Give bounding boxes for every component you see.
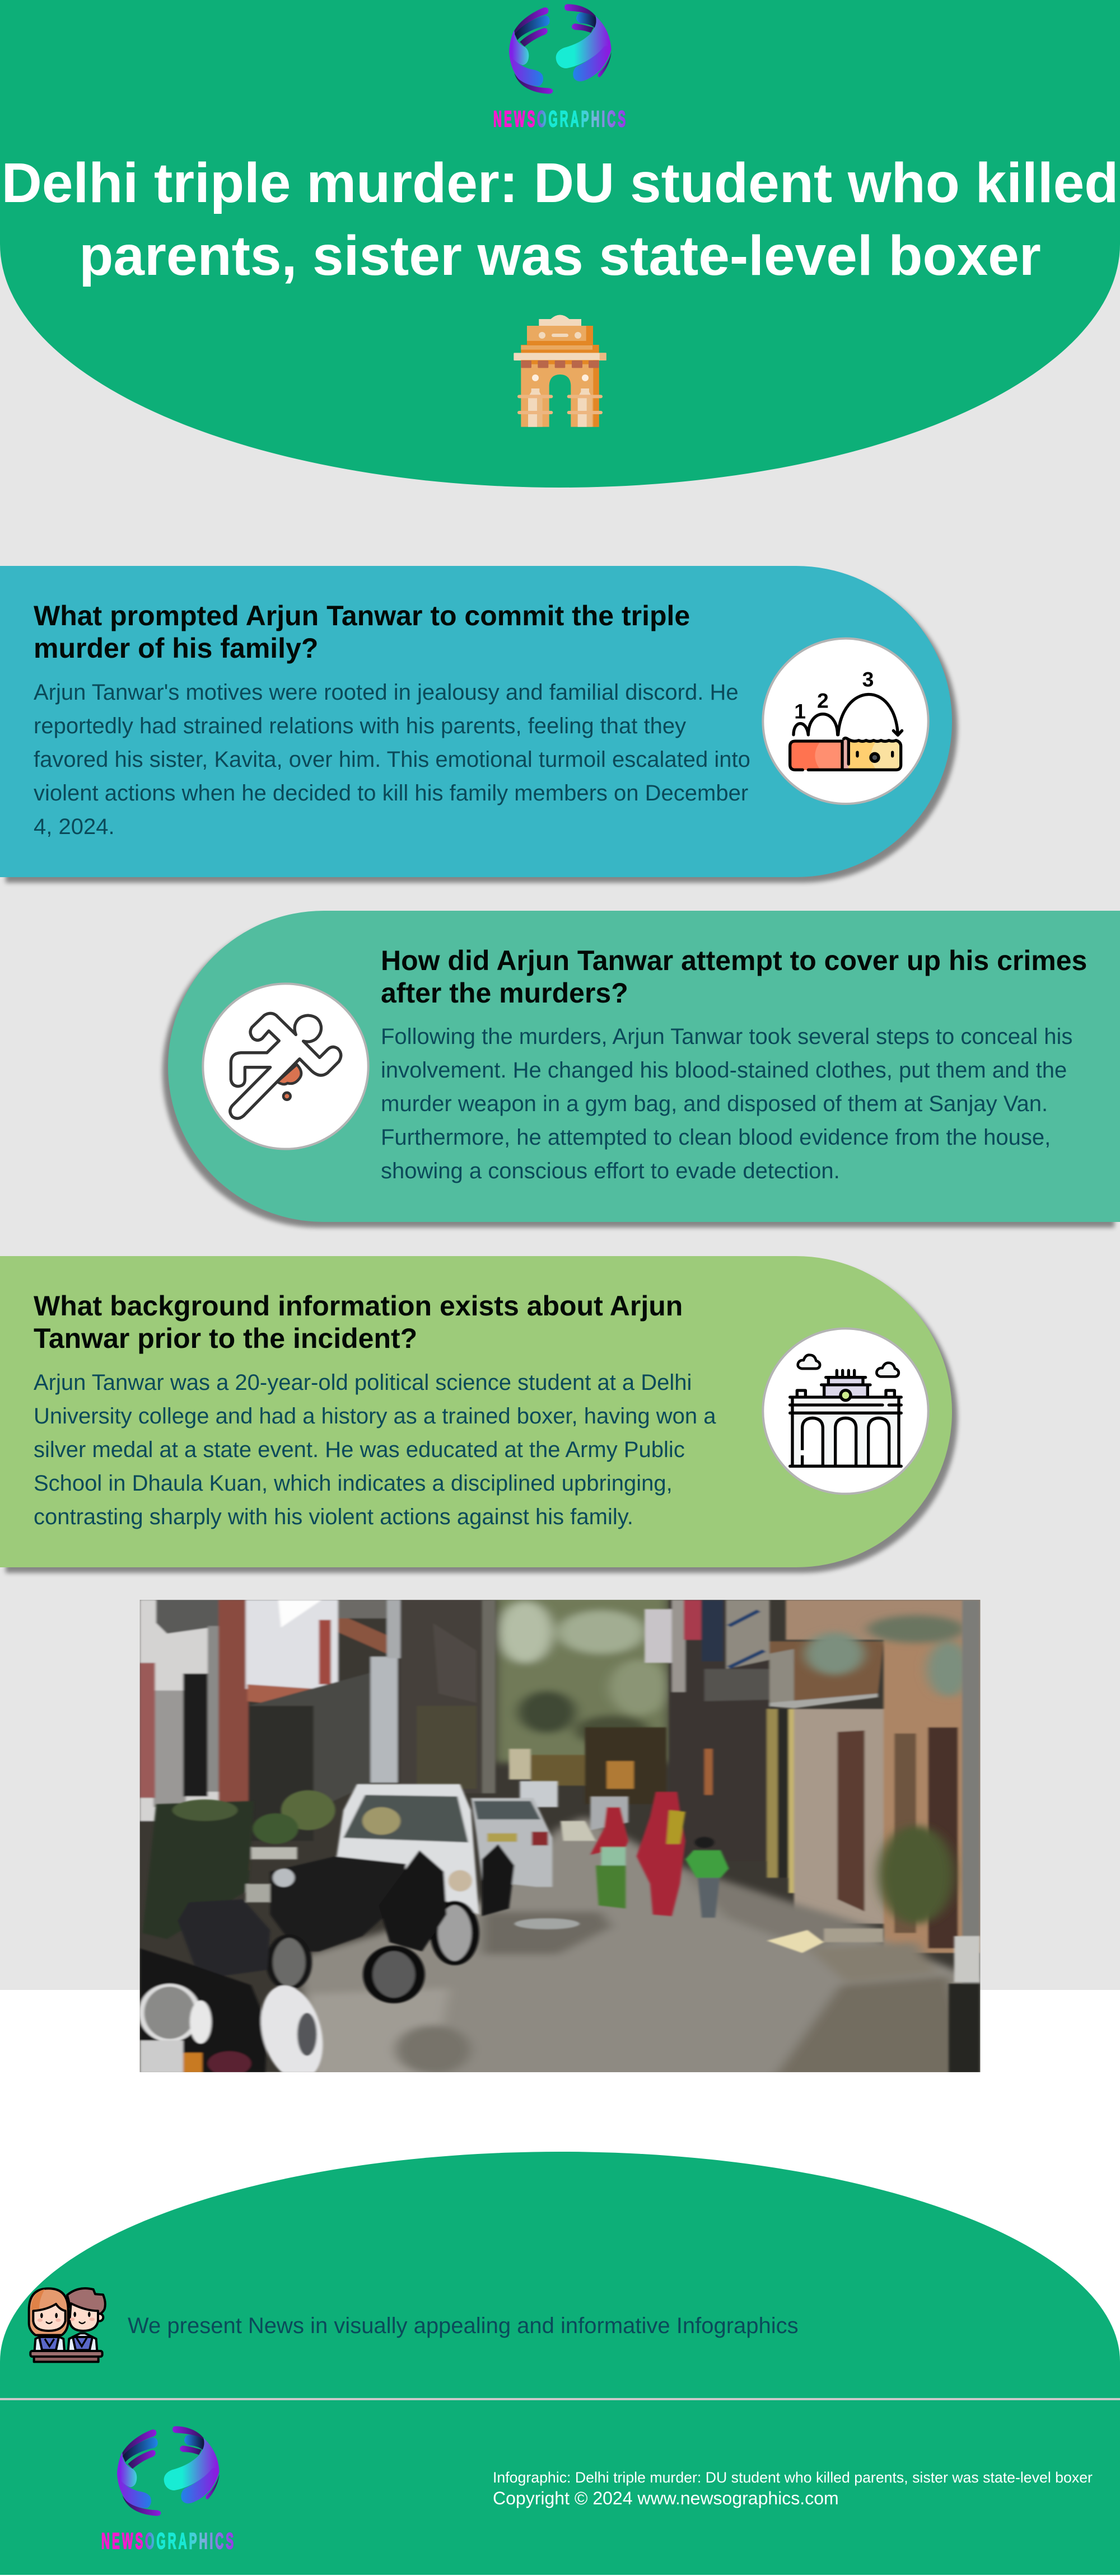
text: cover-up answer: showing a conscious effort to evade detection. [381,1159,840,1183]
logo: footer Newsographics [101,2426,236,2553]
panel: motive (teal card) [0,566,952,877]
text: cover-up answer: murder weapon in a gym bag, and disposed of them at Sanjay Van. [381,1092,1048,1116]
footer credit text: Infographic: Delhi triple murder: DU student who killed parents, sister was state-level boxer [493,2469,1093,2486]
heading: cover-up question [381,945,1087,1009]
photo: Delhi residential street with parked vehicles and pedestrians [140,1600,980,2072]
text: background answer [34,1370,716,1529]
heading: cover-up question: after the murders? [381,977,628,1009]
heading: motive question [34,600,690,664]
logo: footer Newsographics: NEWSOGRAPHICS [101,2528,236,2553]
heading: cover-up question: How did Arjun Tanwar attempt to cover up his crimes [381,945,1087,976]
footer credit text [493,2469,1093,2508]
footer divider line [0,2398,1120,2400]
text: cover-up answer: involvement. He changed his blood-stained clothes, put them and the [381,1058,1067,1083]
text: motive answer: favored his sister, Kavita, over him. This emotional turmoil escalated into [34,747,750,772]
footer: green arched panel [0,2152,1120,2575]
icon: two student presenters at a desk [28,2287,106,2363]
heading: motive question: murder of his family? [34,633,318,664]
text: cover-up answer [381,1024,1072,1183]
text: motive answer: 4, 2024. [34,814,115,839]
heading: background question: Tanwar prior to the incident? [34,1323,417,1354]
text: background answer: University college and had a history as a trained boxer, having won a [34,1404,716,1428]
panel: cover up (green card) [168,911,1120,1222]
text: motive answer: violent actions when he decided to kill his family members on December [34,781,748,805]
logo: Newsographics: NEWSOGRAPHICS [493,106,628,132]
title [2,152,1118,287]
text: background answer: contrasting sharply with his violent actions against his family. [34,1505,633,1529]
icon: numbered jumps over a belt: 2 [817,689,829,713]
icon: arched gate with clouds [762,1327,930,1495]
icon: numbered jumps over a belt: 3 [862,668,874,691]
heading: background question [34,1290,683,1354]
icon: India Gate [514,315,606,427]
text: background answer: Arjun Tanwar was a 20-year-old political science student at a Delhi [34,1370,692,1395]
text: motive answer: Arjun Tanwar's motives were rooted in jealousy and familial discord. He [34,680,739,705]
heading: background question: What background information exists about Arjun [34,1290,683,1322]
icon: numbered jumps over a belt: 1 [794,699,806,723]
text: background answer: School in Dhaula Kuan, which indicates a disciplined upbringing, [34,1471,673,1496]
footer tagline: We present News in visually appealing and informative Infographics [128,2313,799,2338]
text: background answer: silver medal at a state event. He was educated at the Army Public [34,1437,685,1462]
header: green rounded banner [0,0,1120,488]
footer credit text: Copyright © 2024 www.newsographics.com [493,2488,839,2508]
panel: background (light green card) [0,1256,952,1567]
text: cover-up answer: Following the murders, Arjun Tanwar took several steps to conceal his [381,1024,1072,1049]
text: motive answer [34,680,750,839]
icon: running figure with blood [202,982,370,1150]
logo: Newsographics [493,4,628,132]
title: parents, sister was state-level boxer [79,224,1041,287]
icon: numbered jumps over a belt [762,637,930,805]
text: motive answer: reportedly had strained relations with his parents, feeling that they [34,714,686,738]
heading: motive question: What prompted Arjun Tanwar to commit the triple [34,600,690,631]
text: cover-up answer: Furthermore, he attempted to clean blood evidence from the house, [381,1125,1051,1150]
title: Delhi triple murder: DU student who killed [2,152,1118,214]
page background: grey band [0,0,1120,1990]
